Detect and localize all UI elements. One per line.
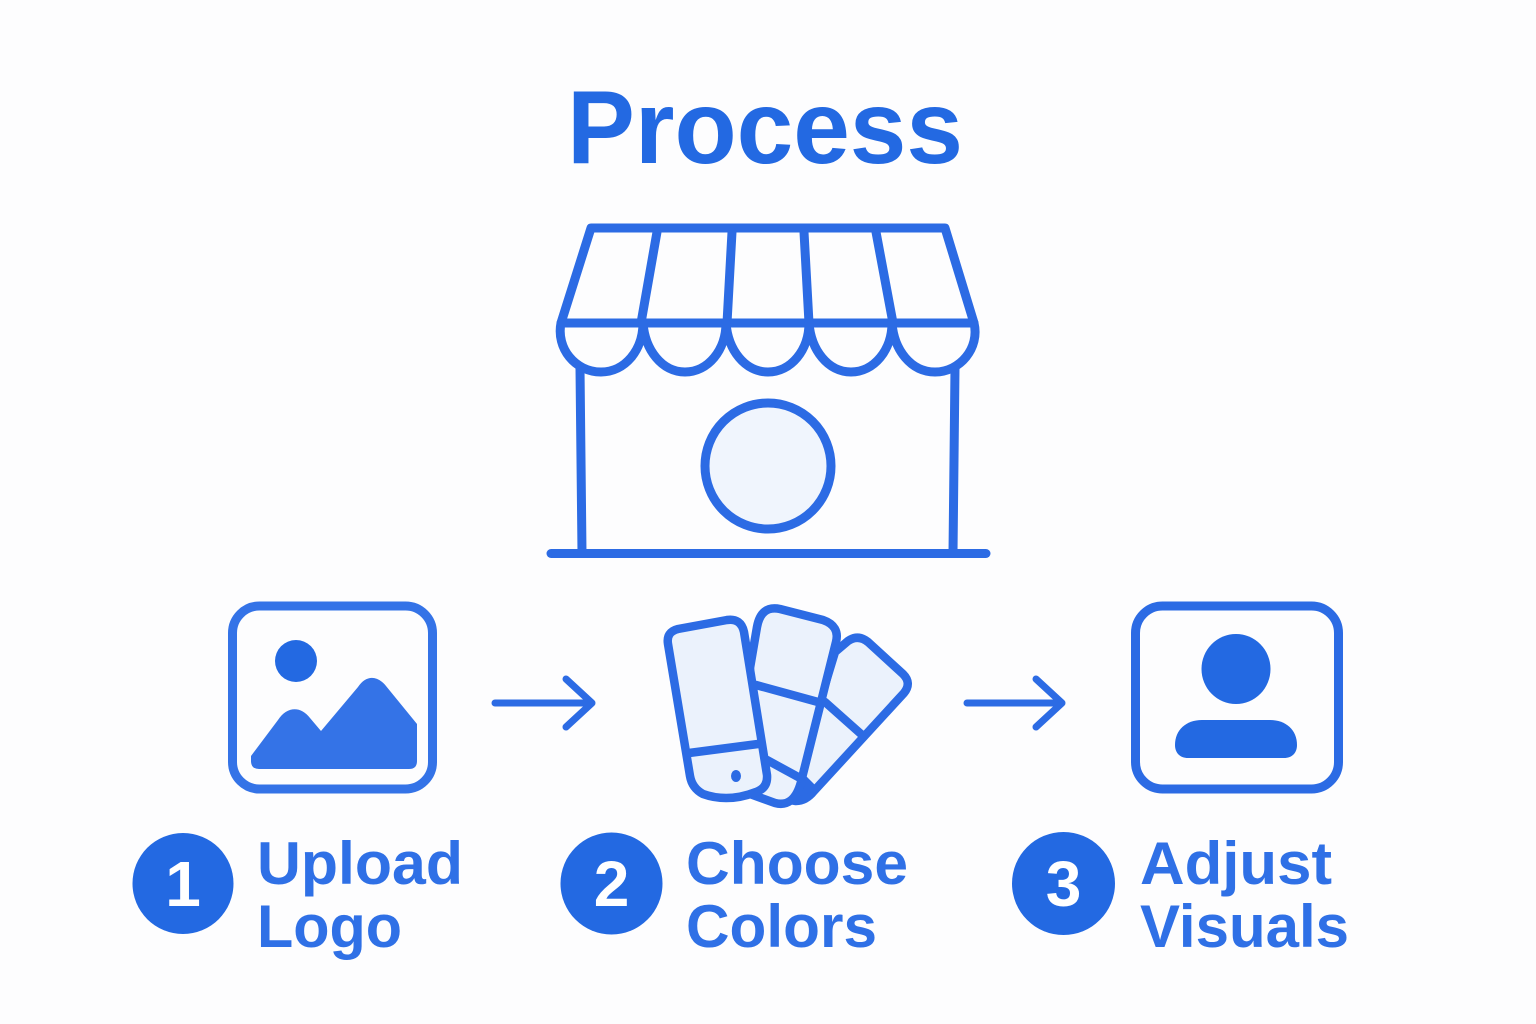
- label: Choose Colors: Choose: [686, 830, 908, 897]
- awning stripes: [641, 232, 893, 323]
- label: Upload Logo: Logo: [257, 893, 402, 960]
- label: Choose Colors: [686, 830, 908, 960]
- right swatch divider: [799, 702, 861, 798]
- swatch hole: [731, 770, 741, 782]
- left swatch: [668, 620, 767, 798]
- number badge 3: [1012, 832, 1115, 935]
- frame: [232, 606, 432, 789]
- awning roof: [561, 228, 974, 323]
- label: Adjust Visuals: Adjust: [1140, 830, 1332, 897]
- number badge 2: [560, 832, 662, 934]
- title: Process: [567, 70, 963, 186]
- number 3: 3: [1046, 848, 1081, 920]
- middle swatch divider: [756, 685, 818, 778]
- shop floor line: [551, 549, 986, 558]
- round shop window: [705, 403, 831, 529]
- label: Choose Colors: Colors: [686, 893, 877, 960]
- number 2: 2: [594, 848, 629, 920]
- number 1: 1: [165, 848, 201, 920]
- left swatch divider: [689, 744, 758, 753]
- arrow 2: [967, 679, 1062, 727]
- middle swatch: [750, 608, 837, 804]
- icon: storefront: [551, 228, 986, 554]
- label: Upload Logo: Upload: [257, 830, 463, 897]
- label: Adjust Visuals: Visuals: [1140, 893, 1349, 960]
- label: Upload Logo: [257, 830, 463, 960]
- step 3: [1012, 830, 1349, 960]
- icon: colour swatch fan: [668, 608, 908, 804]
- icon: upload image frame: [232, 606, 432, 789]
- shoulders: [1175, 720, 1297, 758]
- mountains: [251, 678, 417, 769]
- awning scallops: [560, 323, 975, 372]
- frame: [1136, 606, 1338, 789]
- sun: [275, 640, 317, 682]
- right swatch: [790, 638, 908, 801]
- shop walls: [580, 368, 955, 553]
- label: Adjust Visuals: [1140, 830, 1349, 960]
- head: [1202, 634, 1270, 704]
- number badge 1: [132, 833, 234, 934]
- arrow 1: [495, 679, 592, 727]
- step 1: [132, 830, 463, 960]
- step 2: [560, 830, 908, 960]
- icon: adjust visuals profile frame: [1136, 606, 1338, 789]
